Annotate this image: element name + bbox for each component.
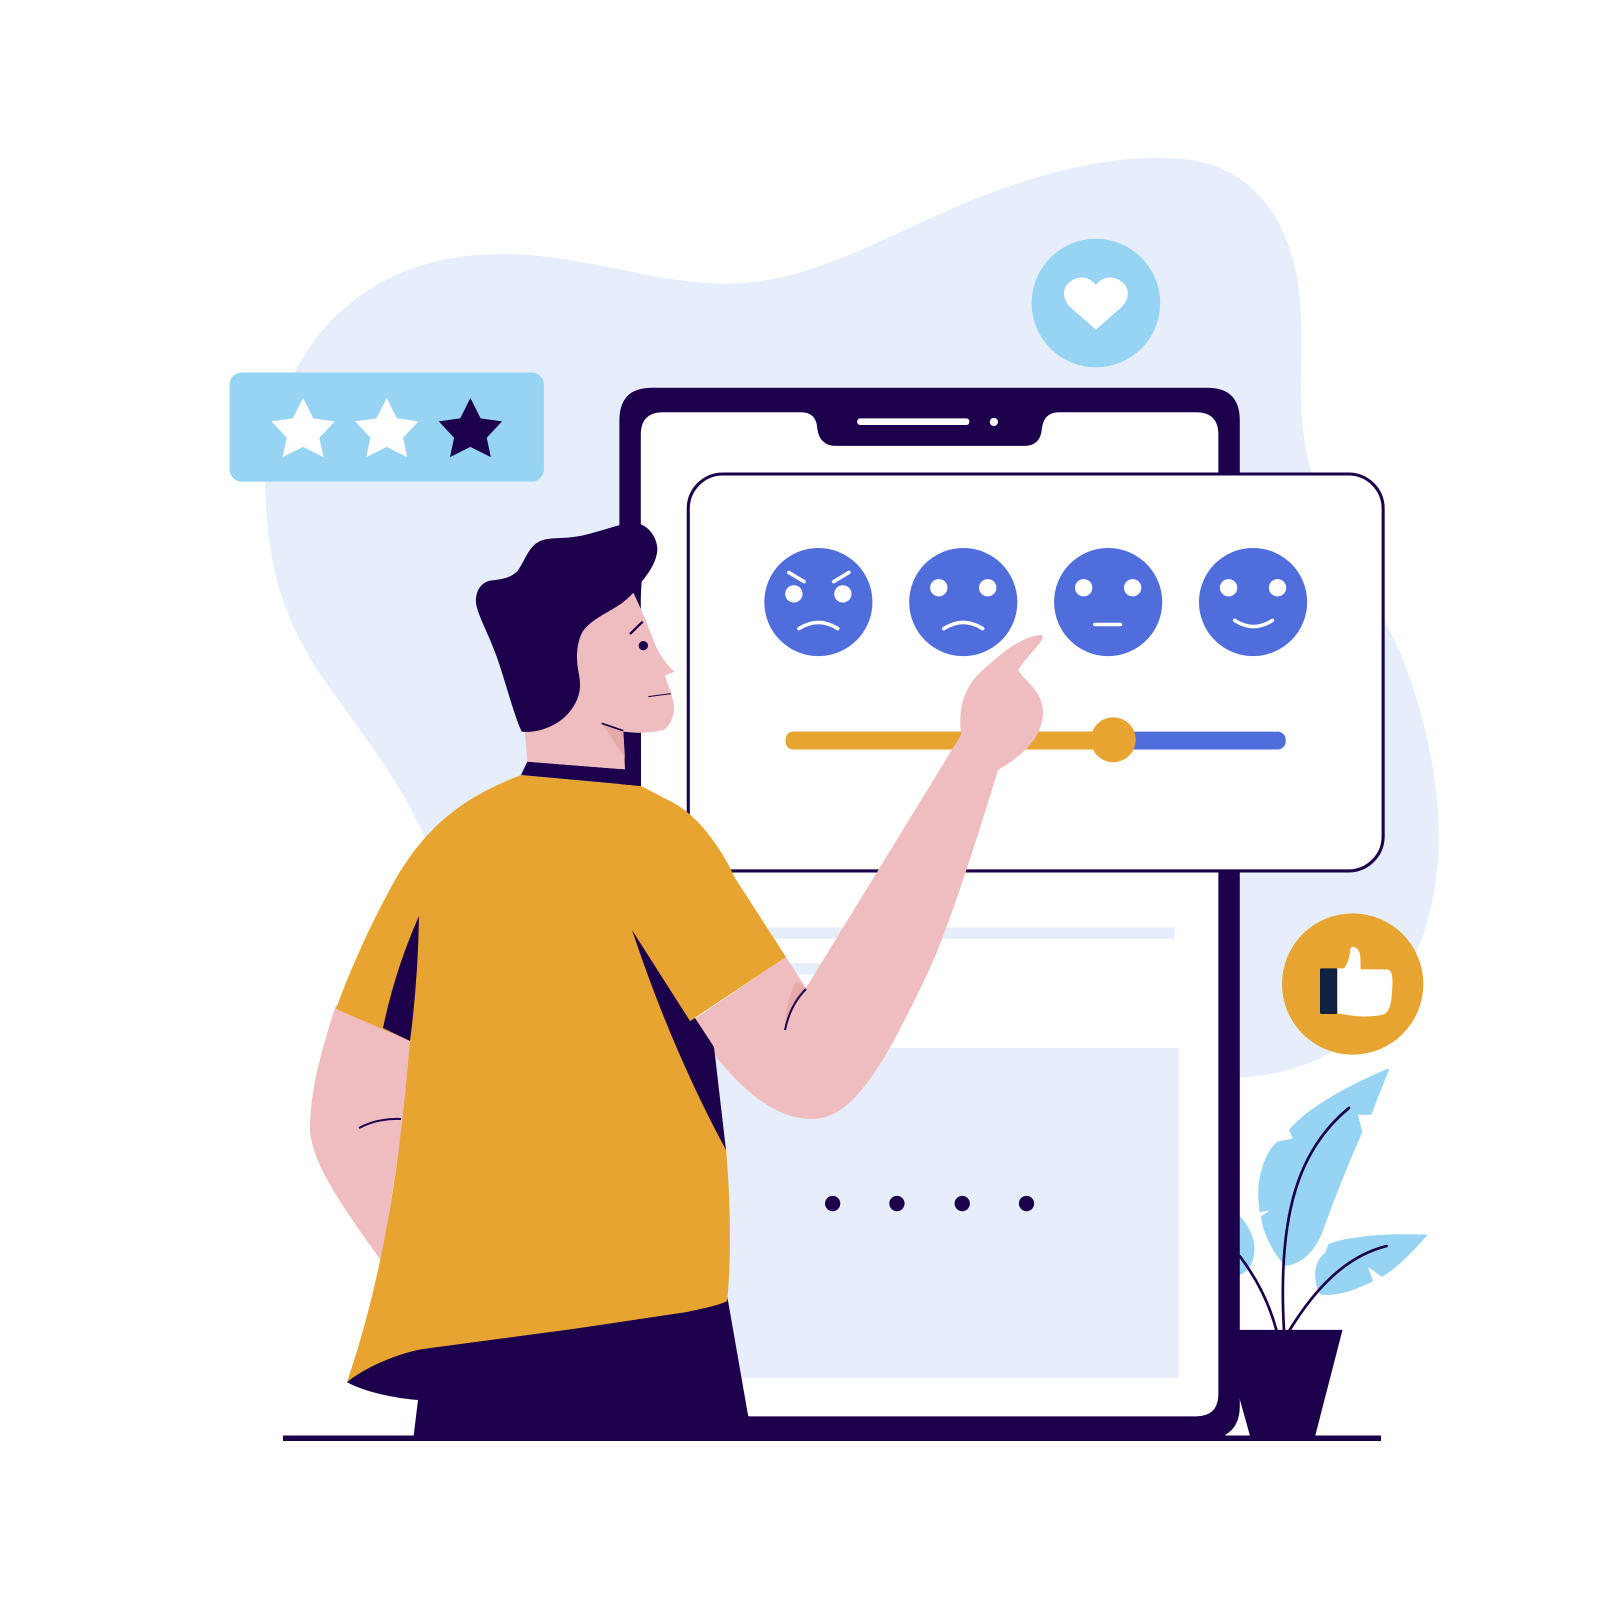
shirt fold left — [383, 916, 419, 1041]
background blob — [265, 158, 1439, 1078]
jaw line — [602, 723, 623, 731]
plant with pot — [1214, 1068, 1428, 1438]
left arm — [310, 1005, 415, 1262]
head — [476, 524, 675, 786]
shirt fold right — [632, 930, 726, 1150]
panel: star rating — [230, 372, 544, 482]
pants — [347, 1295, 760, 1441]
plant pot — [1214, 1330, 1343, 1438]
neck shadow — [602, 723, 625, 758]
icon: happy face — [1199, 548, 1307, 656]
icon: neutral face — [1054, 548, 1162, 656]
icon: heart badge — [1032, 239, 1160, 367]
icon: star two — [355, 398, 418, 457]
icon: star one — [271, 398, 335, 457]
shirt — [336, 775, 786, 1382]
phone screen — [641, 412, 1218, 1416]
mouth — [648, 694, 671, 697]
icon: angry face — [764, 548, 872, 656]
image placeholder with dots — [704, 1048, 1179, 1378]
phone — [619, 388, 1240, 1441]
content bar one — [755, 928, 1174, 939]
icon: thumbs up badge — [1282, 913, 1423, 1055]
ground line — [283, 1436, 1381, 1441]
plant leaf right — [1315, 1234, 1428, 1295]
phone speaker — [857, 418, 969, 425]
icon: star three dark — [439, 398, 502, 457]
phone camera — [990, 418, 998, 426]
person — [310, 524, 1043, 1441]
left arm crease — [359, 1119, 401, 1128]
plant stems — [1240, 1108, 1387, 1330]
plant leaf left — [1233, 1214, 1254, 1275]
plant leaf large — [1258, 1068, 1390, 1266]
eye — [639, 641, 648, 650]
slider — [786, 717, 1286, 762]
collar — [521, 762, 641, 786]
right arm and hand — [690, 635, 1043, 1119]
eyebrow — [630, 622, 643, 634]
neck shadow on phone — [620, 730, 641, 786]
face and neck — [525, 593, 675, 769]
icon: sad face — [909, 548, 1017, 656]
elbow crease — [785, 981, 806, 1030]
content bar two — [755, 963, 878, 974]
hair — [476, 524, 657, 732]
panel: feedback card — [688, 474, 1383, 871]
